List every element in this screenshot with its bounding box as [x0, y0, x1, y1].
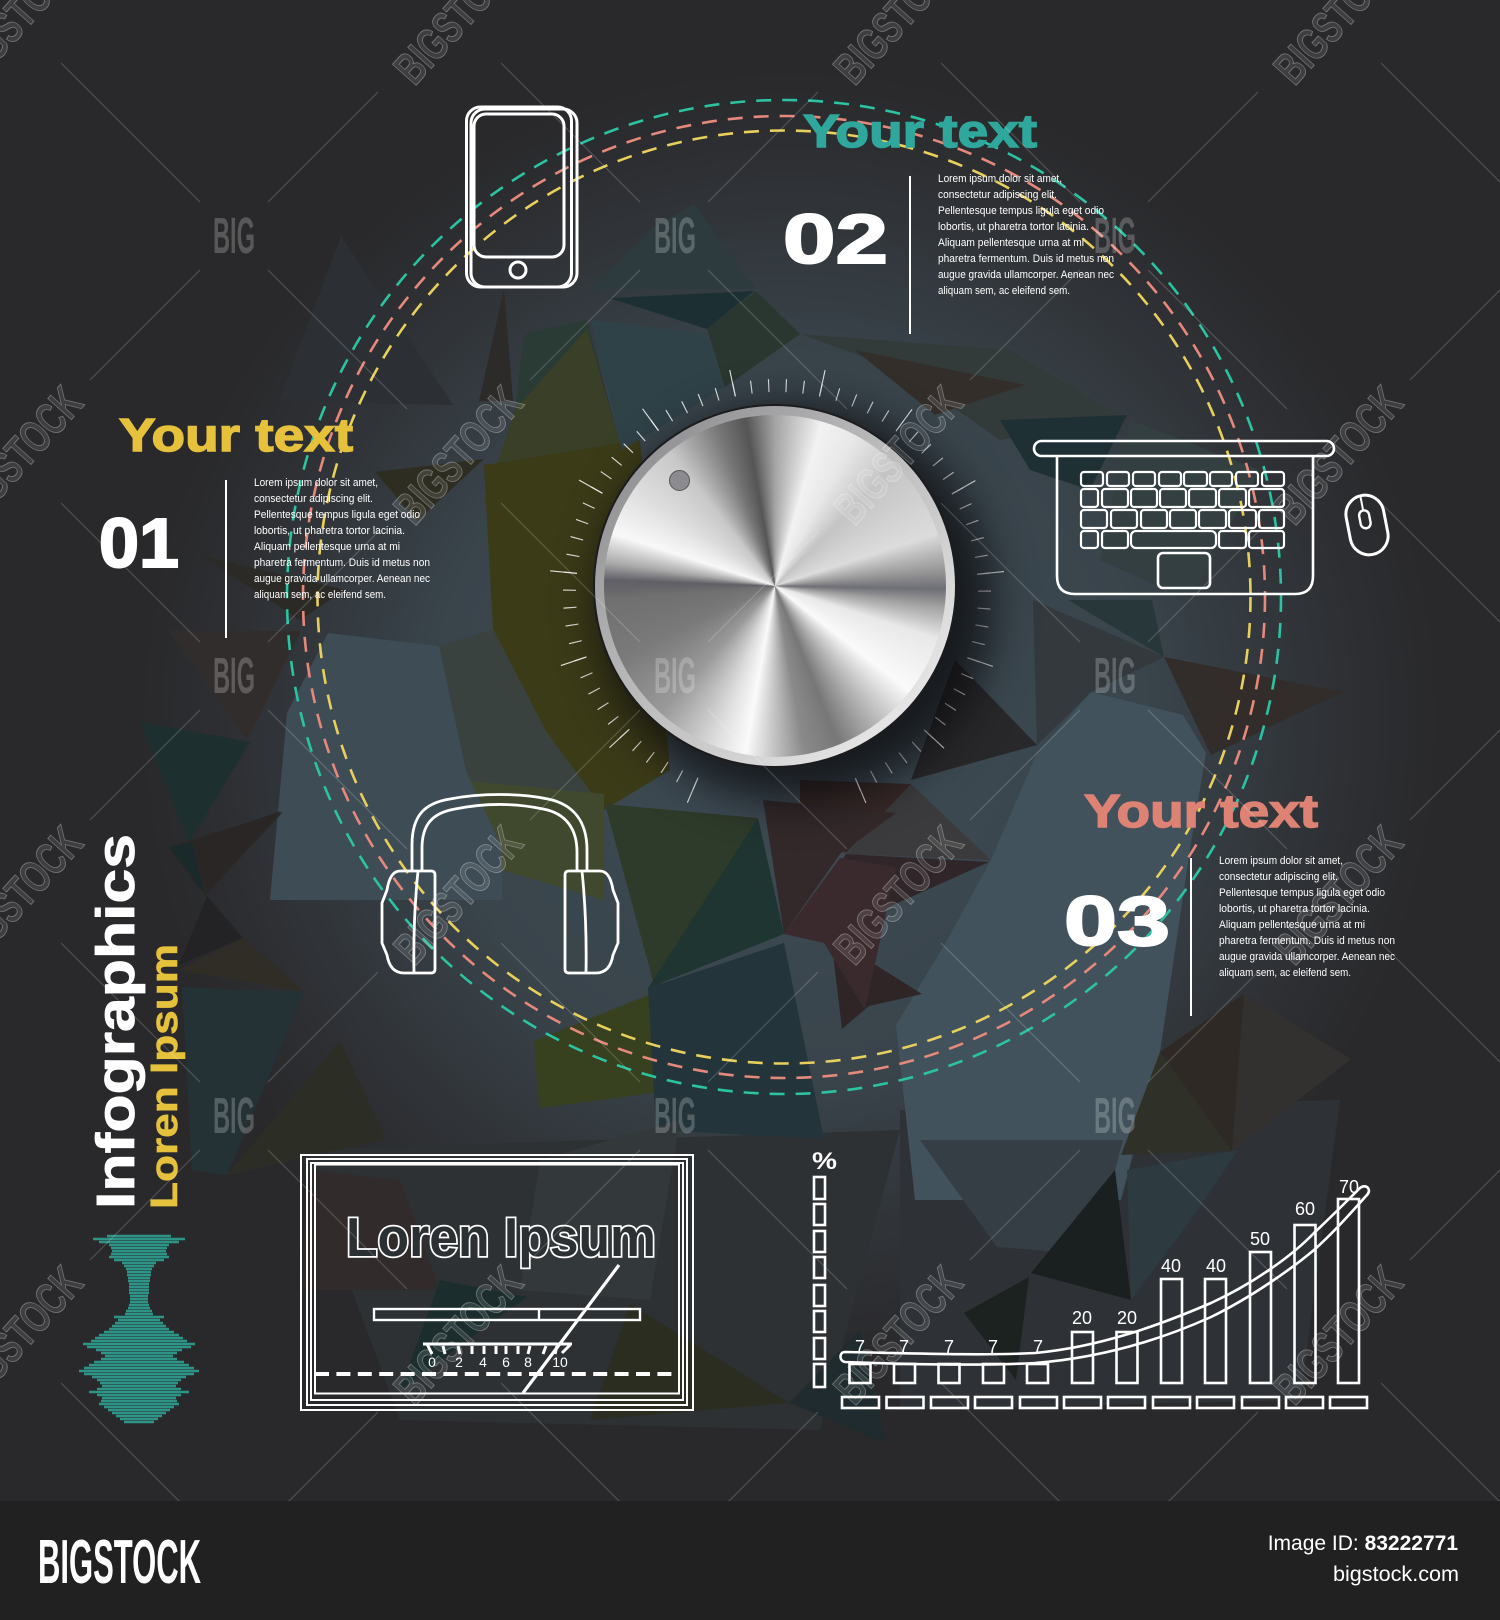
paragraph 03: Pellentesque tempus ligula eget odio [1219, 887, 1385, 899]
paragraph 03: consectetur adipiscing elit. [1219, 871, 1338, 883]
chart value labels: 40 [1161, 1256, 1181, 1276]
section 02 [783, 105, 1114, 334]
paragraph 01: Lorem ipsum dolor sit amet, [254, 477, 378, 489]
watermark: BIG grid: BIG [654, 1087, 696, 1144]
chart value labels: 7 [944, 1337, 954, 1357]
watermark: BIGSTOCK diagonals: BIGSTOCK [823, 376, 973, 534]
knob face [604, 415, 946, 757]
section 01 [99, 409, 430, 638]
long ticks [550, 370, 1004, 804]
watermark: BIGSTOCK diagonals: BIGSTOCK [383, 816, 533, 974]
meter scale numbers: 8 [524, 1354, 532, 1370]
number 01: 01 [99, 504, 179, 582]
chart bars [850, 1199, 1359, 1383]
paragraph 01 [254, 477, 430, 601]
chart value labels: 40 [1206, 1256, 1226, 1276]
paragraph 02: aliquam sem, ac eleifend sem. [938, 285, 1070, 297]
paragraph 02: augue gravida ullamcorper. Aenean nec [938, 269, 1114, 281]
subtitle: Loren Ipsum: Loren Ipsum [144, 944, 186, 1209]
chart value labels: 7 [1033, 1337, 1043, 1357]
panel: analog meter [301, 1155, 693, 1410]
chart value labels: 20 [1072, 1308, 1092, 1328]
chart value labels: 7 [855, 1337, 865, 1357]
meter scale [423, 1344, 572, 1354]
knob indicator dot [669, 470, 690, 491]
footer logo: BIGSTOCK [38, 1528, 201, 1597]
paragraph 03: lobortis, ut pharetra tortor lacinia. [1219, 903, 1370, 915]
watermark: BIG grid: BIG [213, 207, 255, 264]
icon: headphones [382, 794, 618, 973]
middle pink ring [303, 116, 1265, 1078]
chart percent label: % [812, 1148, 837, 1175]
meter dashed line [315, 1372, 679, 1376]
paragraph 02: pharetra fermentum. Duis id metus non [938, 253, 1114, 265]
section 03 [1064, 785, 1395, 1016]
watermark: BIGSTOCK diagonals: BIGSTOCK [383, 376, 533, 534]
footer site url: bigstock.com [1333, 1561, 1459, 1586]
paragraph 01: pharetra fermentum. Duis id metus non [254, 557, 430, 569]
chart value labels: 50 [1250, 1229, 1270, 1249]
short ticks [563, 379, 991, 790]
paragraph 01: lobortis, ut pharetra tortor lacinia. [254, 525, 405, 537]
divider 01 [225, 480, 227, 638]
knob dial ticks [550, 370, 1004, 804]
meter scale numbers [428, 1354, 568, 1370]
paragraph 03: aliquam sem, ac eleifend sem. [1219, 967, 1351, 979]
watermark: BIG grid: BIG [654, 647, 696, 704]
paragraph 03: pharetra fermentum. Duis id metus non [1219, 935, 1395, 947]
watermark: BIG grid: BIG [213, 1087, 255, 1144]
watermark: BIGSTOCK diagonals: BIGSTOCK [823, 1256, 973, 1414]
paragraph 01: augue gravida ullamcorper. Aenean nec [254, 573, 430, 585]
stock watermarks: BIG [1094, 1087, 1136, 1144]
paragraph 03: Aliquam pellentesque urna at mi [1219, 919, 1365, 931]
meter scale numbers: 10 [552, 1354, 568, 1370]
meter bar [374, 1309, 640, 1320]
icon: smartphone [466, 107, 577, 287]
paragraph 01: consectetur adipiscing elit. [254, 493, 373, 505]
icon: mouse [1343, 492, 1391, 558]
meter scale numbers: 2 [455, 1354, 463, 1370]
footer bar [0, 1501, 1500, 1620]
meter title: Loren Ipsum [346, 1206, 656, 1268]
chart value labels: 7 [899, 1337, 909, 1357]
heading 01: Your text [119, 409, 353, 461]
chart value labels [855, 1177, 1359, 1357]
chart value labels: 60 [1295, 1199, 1315, 1219]
watermark: BIGSTOCK diagonals: BIGSTOCK [823, 816, 973, 974]
heading 03: Your text [1084, 785, 1318, 837]
paragraph 03: Lorem ipsum dolor sit amet, [1219, 855, 1343, 867]
divider 02 [909, 176, 911, 334]
number 03: 03 [1064, 882, 1170, 960]
paragraph 03: augue gravida ullamcorper. Aenean nec [1219, 951, 1395, 963]
inner yellow ring [318, 130, 1250, 1064]
paragraph 01: aliquam sem, ac eleifend sem. [254, 589, 386, 601]
chart y axis blocks [814, 1177, 825, 1387]
outer teal ring [287, 100, 1281, 1094]
watermark: BIG grid [213, 207, 1136, 1144]
watermark: BIG grid: BIG [213, 647, 255, 704]
watermark: BIGSTOCK diagonals: BIGSTOCK [1263, 376, 1413, 534]
paragraph 01: Pellentesque tempus ligula eget odio [254, 509, 420, 521]
chart x axis blocks [842, 1397, 1367, 1408]
chart trend curve [840, 1186, 1369, 1365]
stock watermarks: BIG [1094, 207, 1136, 264]
paragraph 02: Lorem ipsum dolor sit amet, [938, 173, 1062, 185]
chart value labels: 7 [988, 1337, 998, 1357]
meter frames [301, 1155, 693, 1410]
watermark: BIGSTOCK diagonals: BIGSTOCK [1263, 1256, 1413, 1414]
watermark: BIGSTOCK diagonals: BIGSTOCK [383, 1256, 533, 1414]
paragraph 02: Pellentesque tempus ligula eget odio [938, 205, 1104, 217]
meter needle [523, 1265, 619, 1393]
meter scale numbers: 6 [502, 1354, 510, 1370]
stock watermarks: BIG [1094, 647, 1136, 704]
paragraph 03 [1219, 855, 1395, 979]
footer image id: Image ID: 83222771 [1268, 1532, 1458, 1555]
paragraph 02 [938, 173, 1114, 297]
icon: laptop [1034, 441, 1334, 594]
metal knob [595, 406, 955, 766]
number 02: 02 [783, 200, 888, 278]
title: Infographics: Infographics [86, 834, 146, 1209]
chart value labels: 20 [1117, 1308, 1137, 1328]
icon: waveform [79, 1236, 199, 1422]
paragraph 02: lobortis, ut pharetra tortor lacinia. [938, 221, 1089, 233]
chart: growth bars [812, 1148, 1369, 1408]
chart value labels: 70 [1339, 1177, 1359, 1197]
paragraph 02: consectetur adipiscing elit. [938, 189, 1057, 201]
background and main artwork [79, 98, 1395, 1442]
meter scale numbers: 0 [428, 1354, 436, 1370]
low-poly background [140, 204, 1351, 1443]
dashed rings [287, 100, 1281, 1094]
meter scale numbers: 4 [479, 1354, 487, 1370]
paragraph 01: Aliquam pellentesque urna at mi [254, 541, 400, 553]
watermark: BIG grid: BIG [654, 207, 696, 264]
paragraph 02: Aliquam pellentesque urna at mi [938, 237, 1084, 249]
divider 03 [1190, 858, 1192, 1016]
watermark: BIGSTOCK diagonals: BIGSTOCK [1263, 816, 1413, 974]
heading 02: Your text [803, 105, 1037, 157]
